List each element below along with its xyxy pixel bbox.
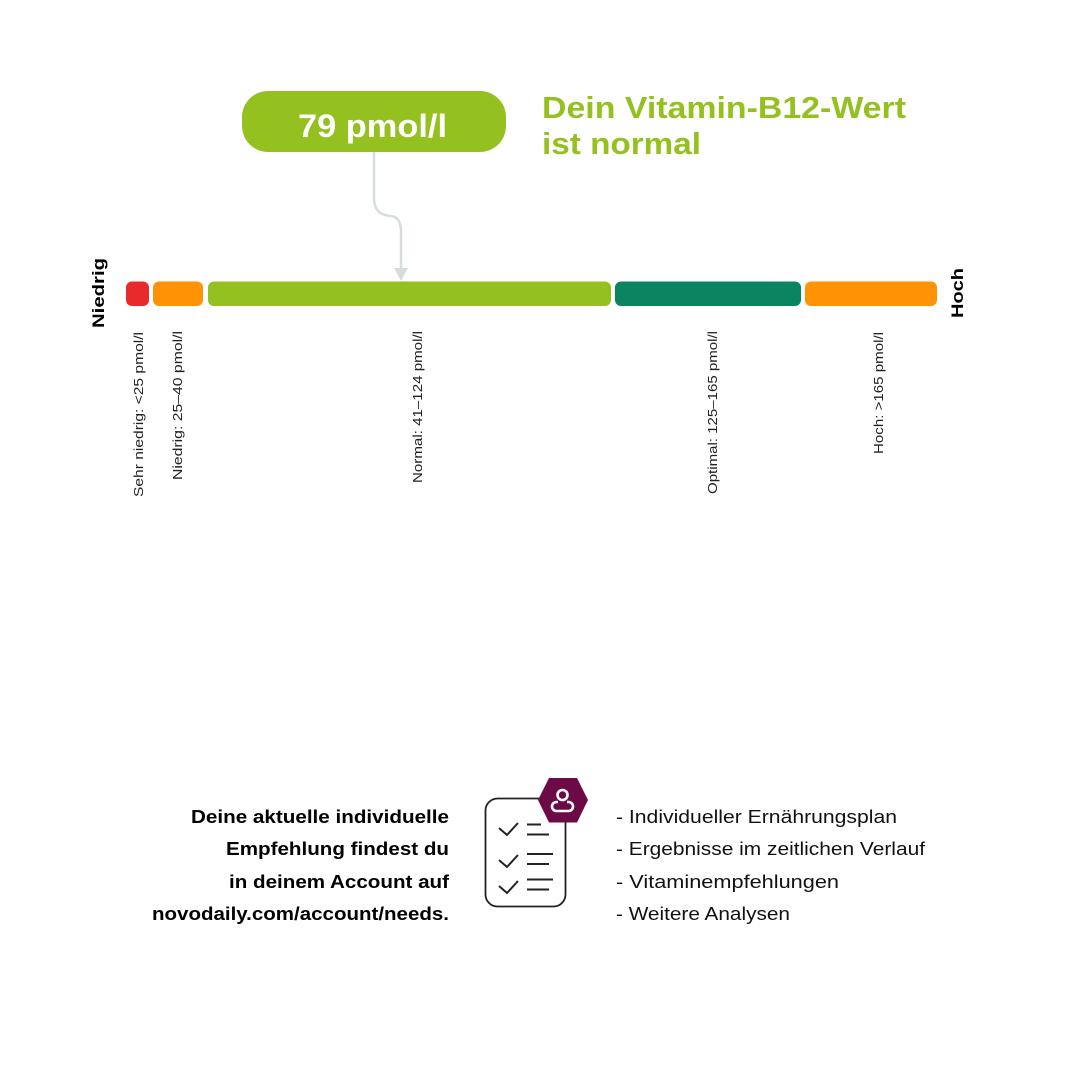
benefits list: - Ergebnisse im zeitlichen Verlauf [616,839,926,859]
segment: optimal [615,282,801,306]
heading: result statement [542,90,906,161]
range label: very low: Sehr niedrig: <25 pmol/l [131,332,146,497]
benefits list: - Individueller Ernährungsplan [616,807,897,827]
segment: high [805,282,937,306]
benefits list: - Weitere Analysen [616,904,790,924]
account text block: in deinem Account auf [229,872,450,892]
benefits list [616,807,926,924]
scale bar [126,282,937,306]
heading: result statement: Dein Vitamin-B12-Wert [542,90,906,125]
segment: very low [126,282,149,306]
range labels [131,331,886,497]
arrow: from value pill to scale [374,152,408,281]
range label: optimal: Optimal: 125–165 pmol/l [705,331,720,494]
heading: result statement: ist normal [542,126,701,161]
range label: low: Niedrig: 25–40 pmol/l [170,331,185,480]
range label: high: Hoch: >165 pmol/l [871,332,886,454]
account text block [152,807,450,924]
icon: checklist with user badge [486,778,588,906]
range label: normal: Normal: 41–124 pmol/l [410,331,425,483]
account text block: Deine aktuelle individuelle [191,807,449,827]
account text block: Empfehlung findest du [226,839,449,859]
axis label: high end: Hoch [948,268,967,318]
segment: low [153,282,203,306]
account text block: novodaily.com/account/needs. [152,904,449,924]
value pill: 79 pmol/l [242,91,506,152]
segment: normal [208,282,611,306]
value pill: 79 pmol/l: 79 pmol/l [298,108,447,144]
axis label: low end: Niedrig [89,258,108,328]
benefits list: - Vitaminempfehlungen [616,872,839,892]
